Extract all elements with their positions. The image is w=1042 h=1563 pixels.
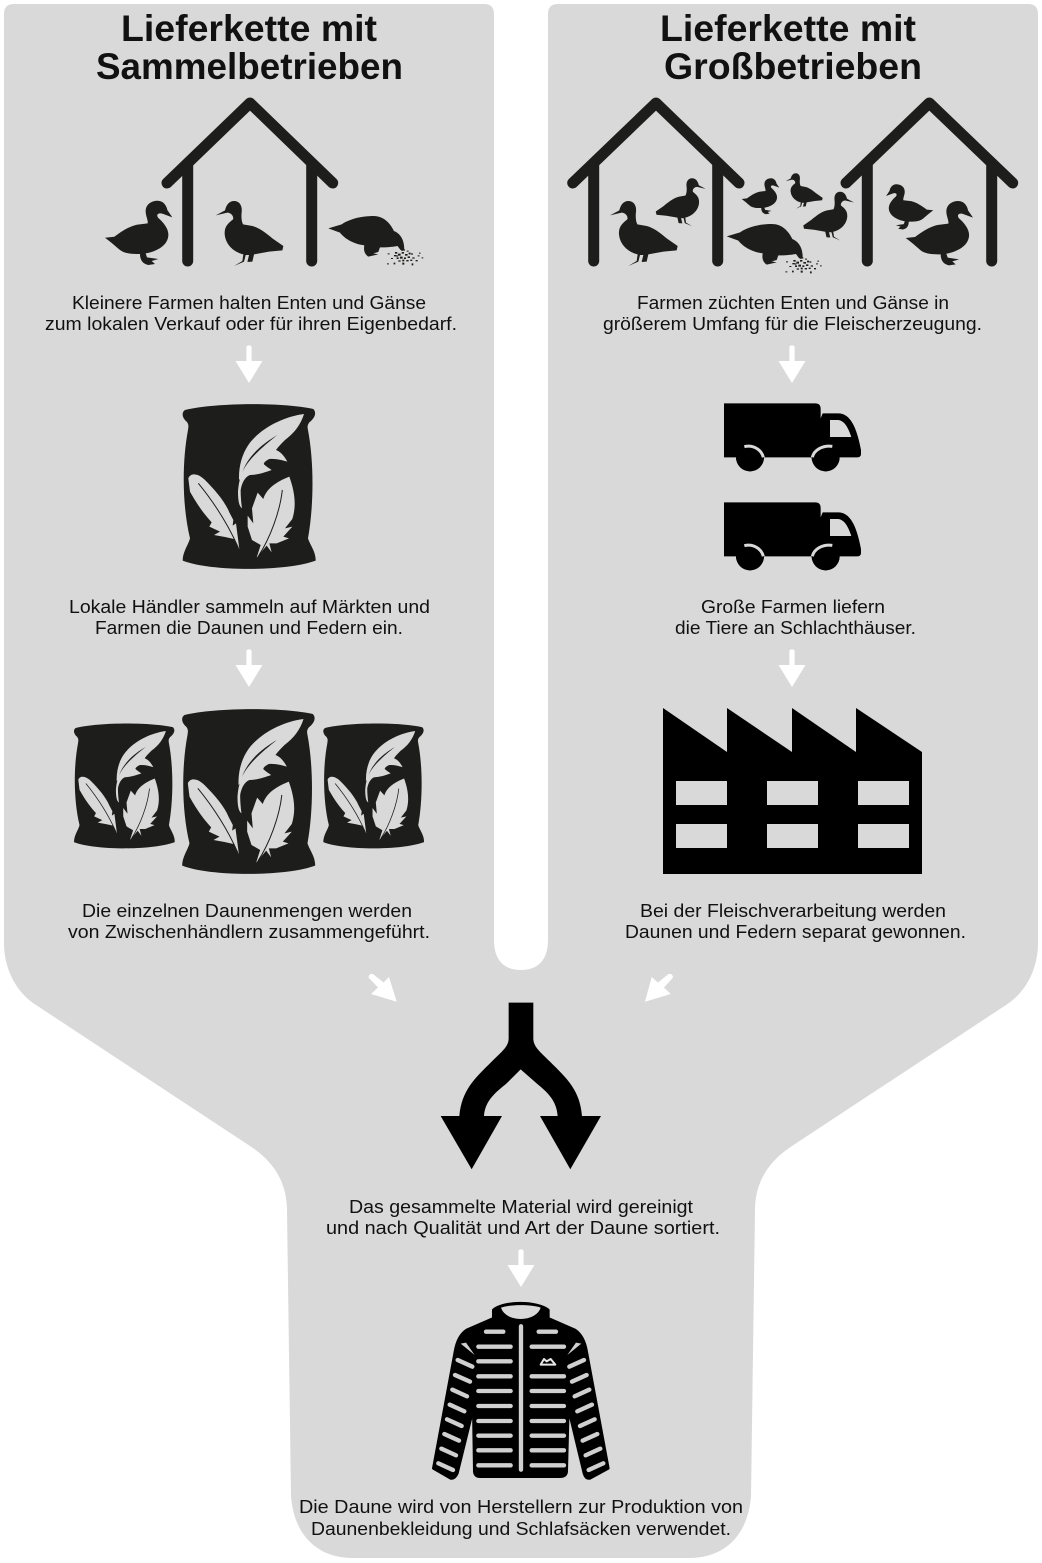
text: local traders: Farmen die Daunen und Federn ein. [95, 617, 403, 638]
text: deliver to slaughterhouses [675, 596, 916, 638]
text: intermediaries [68, 900, 430, 942]
icon: splitting arrow [441, 1003, 601, 1169]
arrow: down [236, 345, 262, 383]
text: deliver to slaughterhouses: die Tiere an Schlachthäuser. [675, 617, 916, 638]
text: sorting [326, 1196, 720, 1238]
text: sorting: und nach Qualität und Art der Daune sortiert. [326, 1217, 720, 1238]
text: small farms: zum lokalen Verkauf oder für ihren Eigenbedarf. [45, 313, 457, 334]
text: meat processing: Daunen und Federn separat gewonnen. [625, 921, 966, 942]
text: local traders: Lokale Händler sammeln auf Märkten und [69, 596, 430, 617]
text: use in products [299, 1496, 743, 1539]
arrow: down [236, 649, 262, 687]
text: large farms: Farmen züchten Enten und Gänse in [637, 292, 949, 313]
text: small farms [45, 292, 457, 334]
text: large farms [603, 292, 982, 334]
text: intermediaries: von Zwischenhändlern zusammengeführt. [68, 921, 430, 942]
text: use in products: Daunenbekleidung und Schlafsäcken verwendet. [311, 1518, 731, 1539]
text: local traders [69, 596, 430, 638]
text: use in products: Die Daune wird von Herstellern zur Produktion von [299, 1496, 743, 1517]
arrow: down [508, 1249, 534, 1287]
icon: factory [663, 708, 922, 874]
icon: two trucks [724, 403, 861, 570]
heading: Lieferkette mit Sammelbetrieben [96, 8, 403, 87]
text: meat processing [625, 900, 966, 942]
text: meat processing: Bei der Fleischverarbeitung werden [640, 900, 946, 921]
arrow: diagonal from right [645, 974, 673, 1002]
arrow: down [778, 345, 806, 383]
heading: Lieferkette mit Großbetrieben: Großbetrieben [664, 46, 922, 87]
text: deliver to slaughterhouses: Große Farmen liefern [701, 596, 885, 617]
text: small farms: Kleinere Farmen halten Enten und Gänse [72, 292, 426, 313]
icon: large farms with ducks [573, 103, 1013, 273]
heading: Lieferkette mit Großbetrieben [660, 8, 922, 87]
text: sorting: Das gesammelte Material wird gereinigt [349, 1196, 693, 1217]
arrow: diagonal from left [368, 974, 397, 1002]
heading: Lieferkette mit Sammelbetrieben: Lieferkette mit [121, 8, 377, 49]
icon: feather sack [183, 404, 316, 569]
icon: small farm with ducks [105, 103, 423, 266]
heading: Lieferkette mit Sammelbetrieben: Sammelbetrieben [96, 46, 403, 87]
arrow: down [778, 649, 806, 687]
icon: three feather sacks [74, 709, 424, 874]
icon: down jacket [433, 1303, 608, 1478]
heading: Lieferkette mit Großbetrieben: Lieferkette mit [660, 8, 916, 49]
text: large farms: größerem Umfang für die Fleischerzeugung. [603, 313, 982, 334]
text: intermediaries: Die einzelnen Daunenmengen werden [82, 900, 412, 921]
